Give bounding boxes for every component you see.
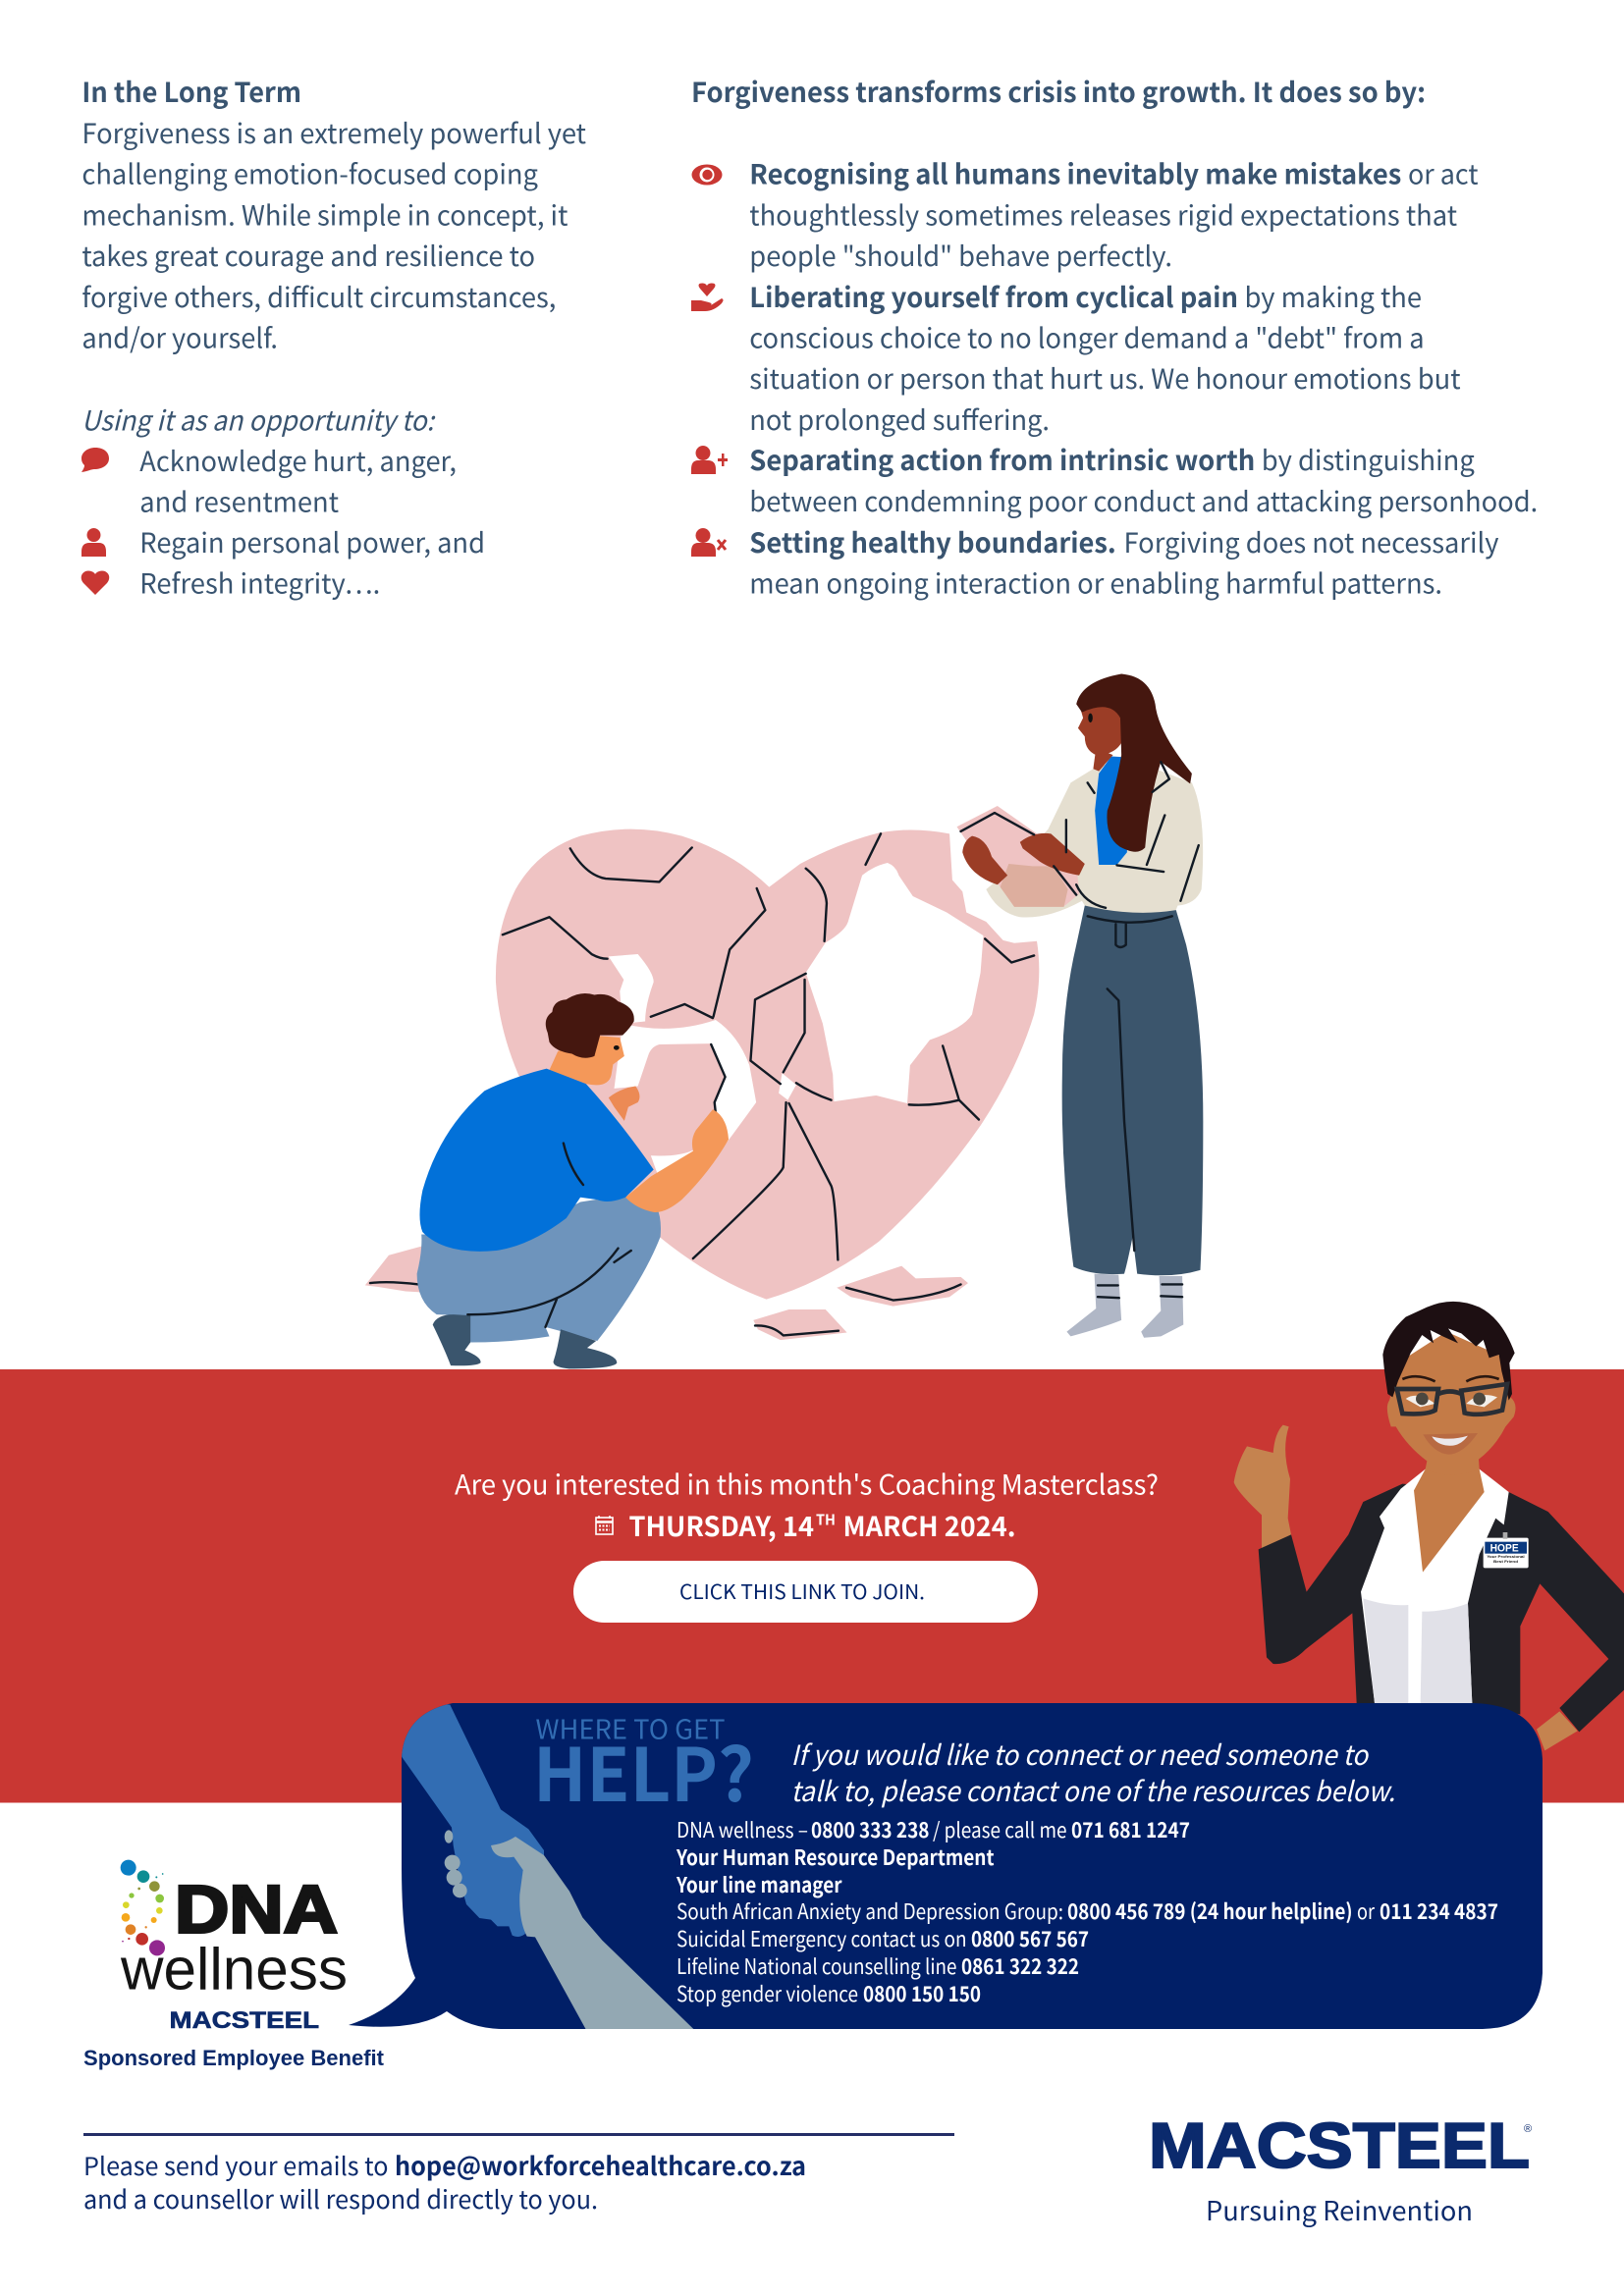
resource list: 0800 567 567 [971,1923,1089,1953]
resource list: Stop gender violence [677,1978,858,2008]
text block: forgiveness intro: forgive others, difficult circumstances, [81,277,556,316]
footer: email contact: hope@workforcehealthcare.co.za [395,2147,806,2183]
panel: in the long term [81,72,586,603]
footer: email contact [83,2133,954,2216]
heart cracks [370,833,1034,1335]
list item: separating: between condemning poor conduct and attacking personhood. [749,481,1538,520]
list item: refresh integrity: Refresh integrity…. [139,563,380,603]
icon: helping hands [393,1698,694,2029]
panel: forgiveness transforms crisis [691,72,1538,603]
help intro text [791,1735,1395,1810]
icon: eye [691,165,723,185]
text block: forgiveness intro: Forgiveness is an extremely powerful yet [81,113,586,152]
event date: THURSDAY, 14 [628,1506,814,1545]
event date: TH [816,1510,836,1529]
logo: dna wellness macsteel: DNA [175,1871,338,1948]
broken heart [365,829,1039,1340]
list item: liberating: not prolonged suffering. [749,400,1050,439]
help intro text: If you would like to connect or need someone to [791,1735,1370,1774]
resource list: 0800 456 789 (24 hour helpline) [1067,1896,1353,1926]
list item: recognising: Recognising all humans inevitably make mistakes [749,154,1401,193]
event date: MARCH 2024. [842,1506,1015,1545]
list item: recognising: people "should" behave perfectly. [749,236,1172,275]
subheading: using it as an opportunity: Using it as an opportunity to: [81,400,436,439]
resource list: 0861 322 322 [961,1950,1079,1981]
resource list: South African Anxiety and Depression Group: [677,1896,1063,1926]
logo: macsteel pursuing reinvention: ® [1524,2123,1532,2135]
icon: dna helix dots [121,1860,165,1955]
character: hope thumbs up [1234,1302,1624,1750]
panel: where to get help speech bubble [349,1698,1543,2029]
list item: liberating: by making the [1245,277,1422,316]
illustration: broken heart with two people [365,674,1203,1368]
list item: liberating [749,277,1461,439]
list item: liberating: Liberating yourself from cyclical pain [749,277,1238,316]
list item: acknowledge: and resentment [139,481,339,520]
resource list: Your Human Resource Department [676,1842,994,1872]
icon: heart [81,571,109,595]
resource list: / please call me [933,1814,1066,1844]
list item: recognising [749,154,1479,275]
list item: acknowledge: Acknowledge hurt, anger, [139,441,457,480]
text block: forgiveness intro: takes great courage and resilience to [81,236,535,275]
button: click this link [573,1561,1038,1623]
resource list: Suicidal Emergency contact us on [677,1923,966,1953]
list item: liberating: conscious choice to no longer demand a "debt" from a [749,318,1425,357]
name badge [1484,1532,1529,1568]
icon: hand holding heart [691,283,723,311]
text block: forgiveness intro: mechanism. While simple in concept, it [81,194,568,234]
heart fragments [365,1246,968,1340]
footer: email contact: Please send your emails to [83,2147,389,2183]
masterclass invitation [455,1465,1159,1623]
resource list: Lifeline National counselling line [677,1950,956,1981]
footer: email contact: and a counsellor will respond directly to you. [83,2180,598,2216]
name badge: Best Friend [1493,1559,1519,1564]
standing woman [957,674,1203,1338]
text block: forgiveness intro: challenging emotion-focused coping [81,154,538,193]
heading: where to get help: HELP? [533,1716,754,1823]
logo: dna wellness macsteel: Sponsored Employee Benefit [83,2046,385,2070]
list item: regain power: Regain personal power, and [139,522,485,561]
list item: recognising: thoughtlessly sometimes releases rigid expectations that [749,194,1457,234]
name badge: HOPE [1490,1542,1519,1554]
heading: forgiveness transforms crisis: Forgiveness transforms crisis into growth. It does so by: [691,72,1426,111]
heading: where to get help: WHERE TO GET [536,1708,725,1747]
icon: speech bubble [81,448,109,472]
logo: dna wellness macsteel [83,1860,385,2070]
list item: setting boundaries: Setting healthy boundaries. [749,522,1116,561]
icon: person plus [691,446,728,474]
resource list [676,1814,1498,2008]
name badge: Your Professional [1487,1554,1525,1559]
logo: dna wellness macsteel: wellness [120,1936,348,2002]
resource list: 0800 333 238 [811,1814,929,1844]
heading: in the long term: In the Long Term [81,72,301,111]
help intro text: talk to, please contact one of the resources below. [791,1771,1395,1810]
text block: forgiveness intro: and/or yourself. [81,318,278,357]
logo: macsteel pursuing reinvention: MACSTEEL [1149,2109,1530,2181]
list item: separating: Separating action from intrinsic worth [749,440,1255,479]
list item: setting boundaries [749,522,1499,603]
list item: liberating: situation or person that hurt us. We honour emotions but [749,358,1461,398]
resource list: 0800 150 150 [863,1978,981,2008]
list item: separating: by distinguishing [1262,440,1475,479]
resource list: 071 681 1247 [1071,1814,1190,1844]
icon: calendar [596,1516,613,1534]
list item: acknowledge [139,441,457,520]
button: click this link: CLICK THIS LINK TO JOIN. [679,1575,925,1605]
resource list: Your line manager [676,1869,842,1899]
list item: setting boundaries: mean ongoing interaction or enabling harmful patterns. [749,563,1442,603]
event date [628,1506,1015,1545]
resource list: DNA wellness – [677,1814,808,1844]
logo: dna wellness macsteel: MACSTEEL [169,2007,319,2034]
list item: setting boundaries: Forgiving does not necessarily [1123,522,1499,561]
panel: red masterclass band [0,1369,1624,1802]
logo: macsteel pursuing reinvention: Pursuing Reinvention [1206,2190,1473,2228]
icon: person [81,528,106,557]
logo: macsteel pursuing reinvention [1149,2109,1532,2228]
kneeling man [417,993,729,1368]
list item: separating [749,440,1538,520]
icon: person cross [691,528,726,557]
list item: recognising: or act [1408,154,1479,193]
resource list: 011 234 4837 [1380,1896,1498,1926]
resource list: or [1357,1896,1376,1926]
text block: forgiveness intro [81,113,586,357]
invitation text: Are you interested in this month's Coaching Masterclass? [455,1465,1159,1504]
